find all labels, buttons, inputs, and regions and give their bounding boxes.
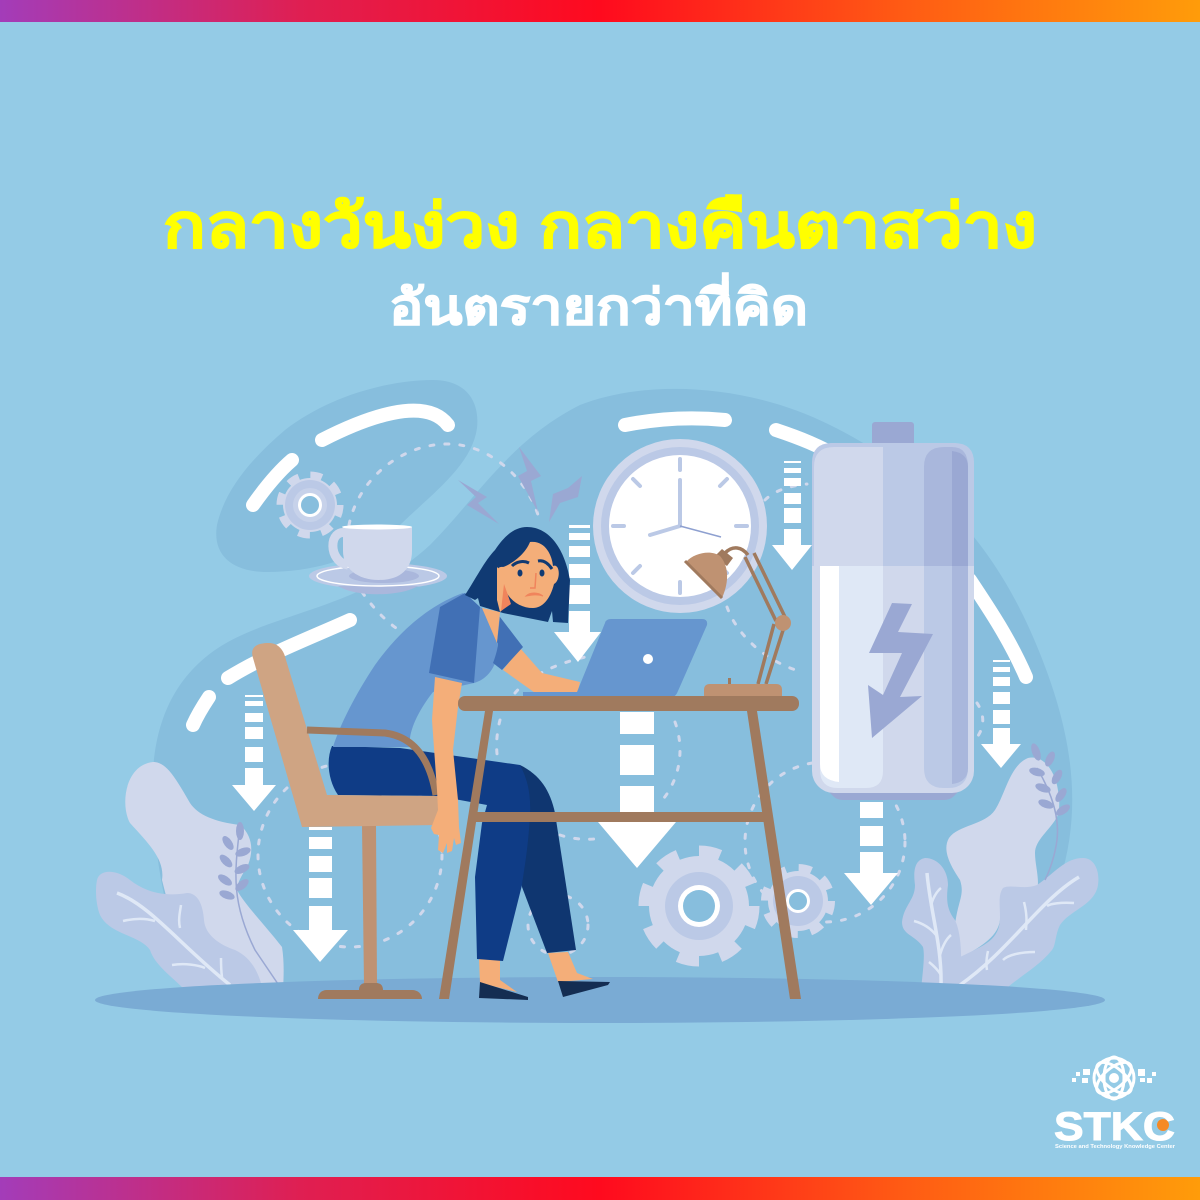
logo tagline: Science and Technology Knowledge Center bbox=[1055, 1144, 1176, 1150]
nose bbox=[530, 573, 536, 588]
clock bbox=[593, 439, 767, 613]
battery bolt icon bbox=[868, 603, 933, 738]
hand on cheek bbox=[497, 567, 510, 612]
atom icon bbox=[1091, 1057, 1137, 1099]
logo squares bbox=[1072, 1069, 1156, 1083]
chair seat and back bbox=[252, 643, 438, 827]
background blob: large bbox=[153, 389, 1072, 990]
sprig bbox=[236, 825, 278, 984]
feet bbox=[479, 952, 593, 992]
down arrow 5 bbox=[772, 461, 812, 570]
clock ticks bbox=[613, 459, 747, 593]
clock hands bbox=[650, 480, 680, 535]
desk lamp bbox=[685, 548, 791, 696]
battery bbox=[812, 422, 974, 800]
title: กลางวันง่วง กลางคืนตาสว่าง bbox=[163, 192, 1037, 260]
dotted circles bbox=[258, 444, 983, 955]
background blob: tilted ellipse bbox=[216, 380, 477, 572]
person bbox=[329, 527, 610, 1000]
left plant bbox=[96, 762, 284, 990]
left small leaf bbox=[902, 858, 961, 990]
logo wordmark: STKC bbox=[1054, 1105, 1175, 1149]
subtitle: อันตรายกว่าที่คิด bbox=[389, 272, 808, 335]
top gradient bar bbox=[0, 0, 1200, 22]
leaf veins bbox=[927, 873, 1079, 985]
shoes bbox=[479, 981, 610, 1000]
laptop bbox=[523, 619, 707, 697]
right plant bbox=[902, 742, 1098, 990]
eyebrows bbox=[512, 561, 552, 569]
torso bbox=[333, 593, 500, 747]
table top bbox=[458, 696, 799, 711]
eyes bbox=[518, 570, 522, 576]
bottom gradient bar bbox=[0, 1177, 1200, 1200]
leaf veins bbox=[117, 893, 230, 985]
table legs and crossbar bbox=[439, 711, 801, 999]
right forearm bbox=[503, 648, 580, 695]
down arrow 7 bbox=[981, 660, 1021, 768]
gear: medium bottom bbox=[766, 869, 830, 933]
down arrow 3 bbox=[554, 525, 601, 662]
sprig bbox=[1037, 768, 1058, 880]
back leg bbox=[512, 765, 576, 953]
lower leaf bbox=[96, 872, 263, 990]
right leaf bbox=[960, 858, 1098, 987]
STKC logo bbox=[1054, 1057, 1176, 1150]
lightning bolts above head bbox=[458, 447, 582, 524]
laptop logo dot bbox=[643, 654, 653, 664]
left arm and hand bbox=[431, 677, 462, 853]
down arrow 6 bbox=[844, 802, 898, 905]
gear: large bottom bbox=[647, 854, 751, 958]
ground shadow bbox=[95, 977, 1105, 1023]
coffee cup and saucer bbox=[309, 524, 447, 594]
neck bbox=[482, 608, 500, 643]
right sleeve bbox=[493, 617, 523, 670]
hair bbox=[465, 527, 570, 623]
mouth bbox=[526, 593, 543, 596]
down arrow 1 bbox=[232, 695, 276, 811]
down arrow 2 bbox=[293, 827, 348, 962]
gear: top left bbox=[281, 476, 339, 534]
left sleeve bbox=[429, 593, 480, 683]
chair armrest bbox=[307, 730, 436, 795]
white motion arcs bbox=[193, 411, 1026, 725]
face bbox=[497, 542, 559, 608]
chair leg and base bbox=[318, 825, 422, 999]
pants bbox=[329, 746, 530, 961]
down arrow 4 bbox=[598, 712, 676, 868]
